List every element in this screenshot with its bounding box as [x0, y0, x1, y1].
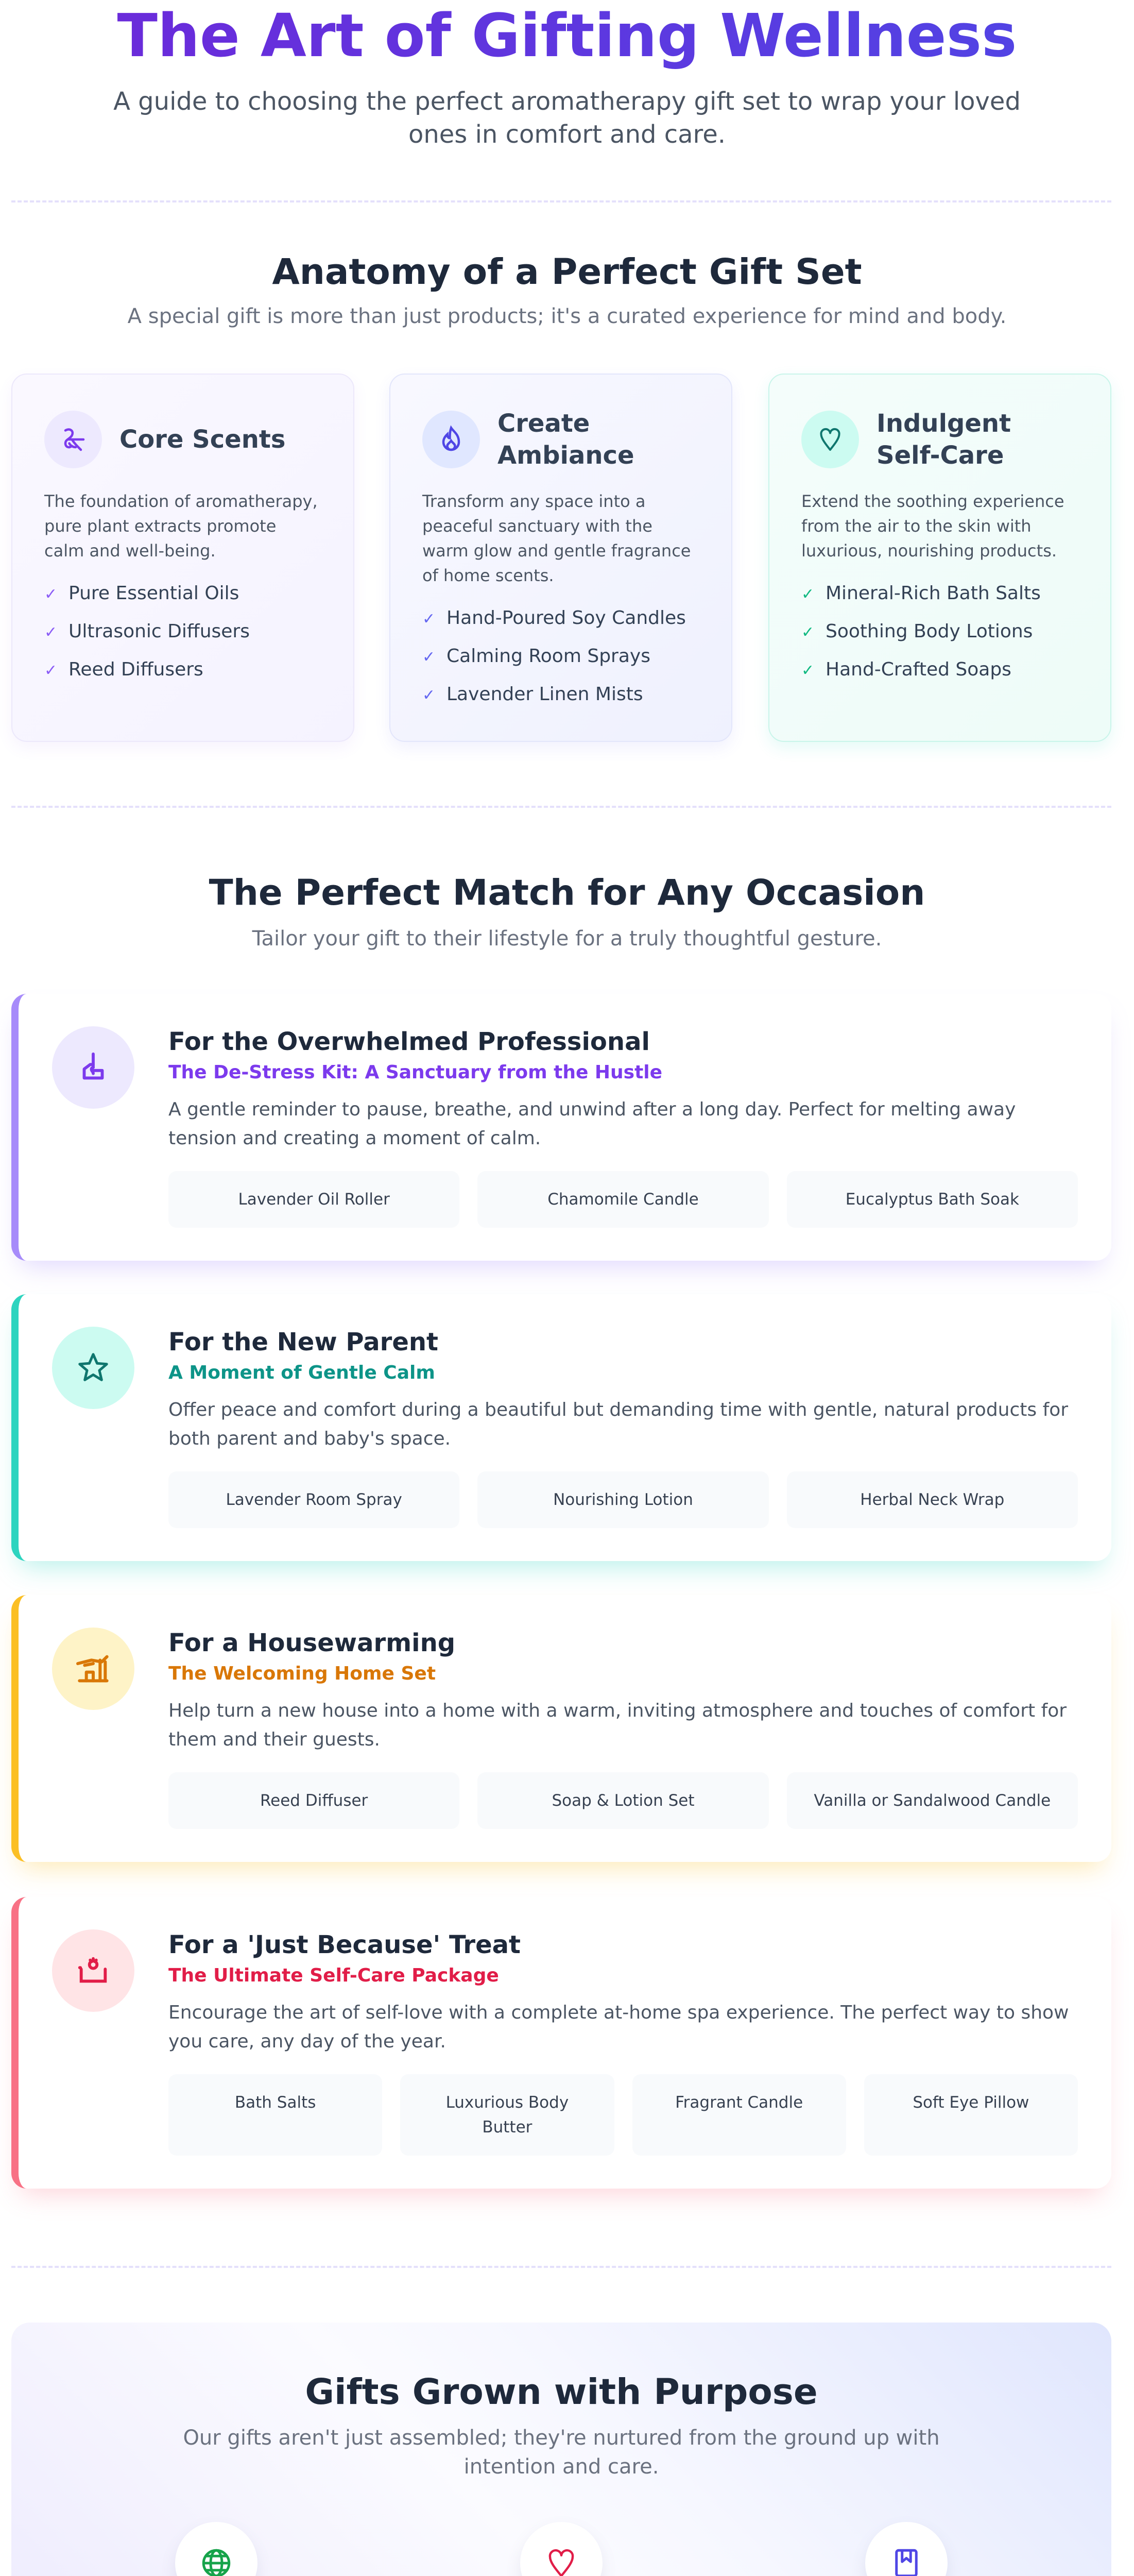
text: self-care description: luxurious, nourishing products. — [801, 541, 1057, 561]
subheading: welcoming home set: The Welcoming Home Set — [168, 1663, 436, 1684]
chips: housewarming products: Vanilla or Sandalwood Candle — [814, 1791, 1051, 1810]
card header: core scents: Core Scents — [119, 425, 285, 454]
chips: housewarming products: Soap & Lotion Set — [552, 1791, 695, 1810]
card header: self-care: Indulgent — [877, 409, 1011, 438]
occasions subtitle: Tailor your gift to their lifestyle for a truly thoughtful gesture. — [252, 927, 882, 951]
list: core scents items: Pure Essential Oils — [68, 583, 239, 604]
panel: just because — [11, 1897, 1111, 2189]
list: core scents items — [44, 583, 250, 680]
text: self-care description: Extend the soothing experience — [801, 492, 1064, 511]
heading: anatomy: Anatomy of a Perfect Gift Set — [272, 251, 862, 293]
chips: professional products: Eucalyptus Bath Soak — [846, 1190, 1019, 1209]
heading: purpose: Gifts Grown with Purpose — [305, 2371, 818, 2413]
list: self-care items: Mineral-Rich Bath Salts — [826, 583, 1041, 604]
list: self-care items: Hand-Crafted Soaps — [826, 659, 1011, 680]
text: housewarming description: Help turn a new house into a home with a warm, inviting atmosphere and touches of comfort for — [168, 1700, 1067, 1721]
text: just because description: you care, any day of the year. — [168, 2031, 446, 2052]
panel: overwhelmed professional — [11, 994, 1111, 1261]
chips: housewarming products — [260, 1791, 1051, 1810]
list: self-care items: ✓ — [801, 662, 814, 680]
list: core scents items: ✓ — [44, 662, 57, 680]
text: self-care description — [801, 492, 1064, 561]
text: ambiance description — [422, 492, 691, 585]
text: professional description: A gentle reminder to pause, breathe, and unwind after a long day. Perfect for melting away — [168, 1099, 1016, 1120]
chips: professional products: Chamomile Candle — [547, 1190, 699, 1209]
text: ambiance description: Transform any space into a — [422, 492, 645, 511]
intro subtitle — [113, 87, 1021, 149]
panel: new parent — [11, 1294, 1111, 1561]
list: ambiance items — [422, 607, 686, 705]
card header: self-care — [801, 409, 1011, 470]
card header: core scents — [44, 411, 285, 468]
icon: globe — [175, 2522, 257, 2576]
intro subtitle: A guide to choosing the perfect aromatherapy gift set to wrap your loved — [113, 87, 1021, 116]
list: ambiance items: Hand-Poured Soy Candles — [446, 607, 686, 629]
chips: just because products: Fragrant Candle — [675, 2093, 803, 2112]
column: story of purpose — [865, 2522, 948, 2576]
heading: occasions: The Perfect Match for Any Occasion — [209, 872, 925, 913]
text: new parent description: both parent and baby's space. — [168, 1428, 451, 1449]
chips: professional products: Lavender Oil Roller — [238, 1190, 390, 1209]
icon: heart — [801, 411, 859, 468]
icon: house — [52, 1628, 134, 1710]
column: michigan farm — [175, 2522, 257, 2576]
list: self-care items: ✓ — [801, 585, 814, 603]
text: self-care description: from the air to the skin with — [801, 516, 1032, 536]
list: self-care items: Soothing Body Lotions — [826, 621, 1033, 642]
text: housewarming description: them and their guests. — [168, 1729, 380, 1750]
text: core scents description: pure plant extracts promote — [44, 516, 276, 536]
icon: spa hand — [52, 1026, 134, 1109]
text: new parent description: Offer peace and comfort during a beautiful but demanding time with gentle, natural products for — [168, 1399, 1068, 1420]
text: ambiance description: of home scents. — [422, 566, 554, 585]
list: core scents items: ✓ — [44, 585, 57, 603]
text: core scents description: calm and well-being. — [44, 541, 216, 561]
panel: core scents — [11, 374, 354, 742]
list: ambiance items: Lavender Linen Mists — [446, 684, 643, 705]
chips: new parent products: Nourishing Lotion — [553, 1490, 693, 1509]
panel: housewarming — [11, 1595, 1111, 1862]
chips: new parent products — [226, 1490, 1004, 1509]
text: core scents description — [44, 492, 318, 561]
text: just because description: Encourage the art of self-love with a complete at-home spa experience. The perfect way to show — [168, 2002, 1069, 2023]
panel: indulgent self-care — [768, 374, 1111, 742]
list: core scents items: ✓ — [44, 623, 57, 641]
text: housewarming description — [168, 1700, 1067, 1750]
chips: housewarming products: Reed Diffuser — [260, 1791, 368, 1810]
card header: self-care: Self-Care — [877, 441, 1004, 470]
subheading: self-care package: The Ultimate Self-Care Package — [168, 1965, 499, 1986]
list: self-care items: ✓ — [801, 623, 814, 641]
card header: ambiance — [422, 409, 634, 470]
chips: just because products — [235, 2093, 1029, 2137]
panel: create ambiance — [389, 374, 732, 742]
purpose subtitle: intention and care. — [464, 2455, 659, 2479]
chips: new parent products: Lavender Room Spray — [226, 1490, 402, 1509]
heading: housewarming: For a Housewarming — [168, 1629, 455, 1657]
icon: gift basket — [52, 1929, 134, 2012]
purpose subtitle: Our gifts aren't just assembled; they're nurtured from the ground up with — [183, 2426, 940, 2450]
chips: just because products: Luxurious Body — [446, 2093, 569, 2112]
title: The Art of Gifting Wellness — [117, 2, 1017, 71]
text: ambiance description: peaceful sanctuary with the — [422, 516, 652, 536]
chips: just because products: Butter — [482, 2118, 532, 2137]
text: professional description: tension and creating a moment of calm. — [168, 1128, 541, 1149]
text: new parent description — [168, 1399, 1068, 1449]
card header: ambiance: Create — [497, 409, 590, 438]
text: core scents description: The foundation of aromatherapy, — [44, 492, 318, 511]
purpose subtitle — [183, 2426, 940, 2479]
list: ambiance items: ✓ — [422, 648, 435, 666]
list: ambiance items: Calming Room Sprays — [446, 646, 650, 667]
icon: flame — [422, 411, 480, 468]
text: just because description — [168, 2002, 1069, 2052]
subheading: gentle calm: A Moment of Gentle Calm — [168, 1362, 435, 1383]
list: ambiance items: ✓ — [422, 686, 435, 704]
chips: just because products: Soft Eye Pillow — [913, 2093, 1029, 2112]
chips: new parent products: Herbal Neck Wrap — [860, 1490, 1004, 1509]
icon: star — [52, 1327, 134, 1409]
column: handcrafted — [520, 2549, 603, 2576]
subheading: de-stress kit: The De-Stress Kit: A Sanctuary from the Hustle — [168, 1062, 662, 1083]
list: self-care items — [801, 583, 1041, 680]
heading: just because: For a 'Just Because' Treat — [168, 1930, 521, 1959]
heading: new parent: For the New Parent — [168, 1328, 438, 1357]
list: ambiance items: ✓ — [422, 610, 435, 628]
anatomy subtitle: A special gift is more than just products; it's a curated experience for mind and body. — [128, 304, 1006, 328]
intro subtitle: ones in comfort and care. — [408, 120, 726, 149]
list: core scents items: Ultrasonic Diffusers — [68, 621, 250, 642]
text: professional description — [168, 1099, 1016, 1149]
text: ambiance description: warm glow and gentle fragrance — [422, 541, 691, 561]
card header: ambiance: Ambiance — [497, 441, 634, 470]
panel: gifts grown with purpose — [11, 2323, 1111, 2576]
icon: herb — [44, 411, 102, 468]
chips: professional products — [238, 1190, 1019, 1209]
icon: bookmark book — [865, 2522, 948, 2576]
chips: just because products: Bath Salts — [235, 2093, 316, 2112]
heading: professional: For the Overwhelmed Professional — [168, 1027, 650, 1056]
list: core scents items: Reed Diffusers — [68, 659, 203, 680]
icon: heart — [520, 2522, 603, 2576]
